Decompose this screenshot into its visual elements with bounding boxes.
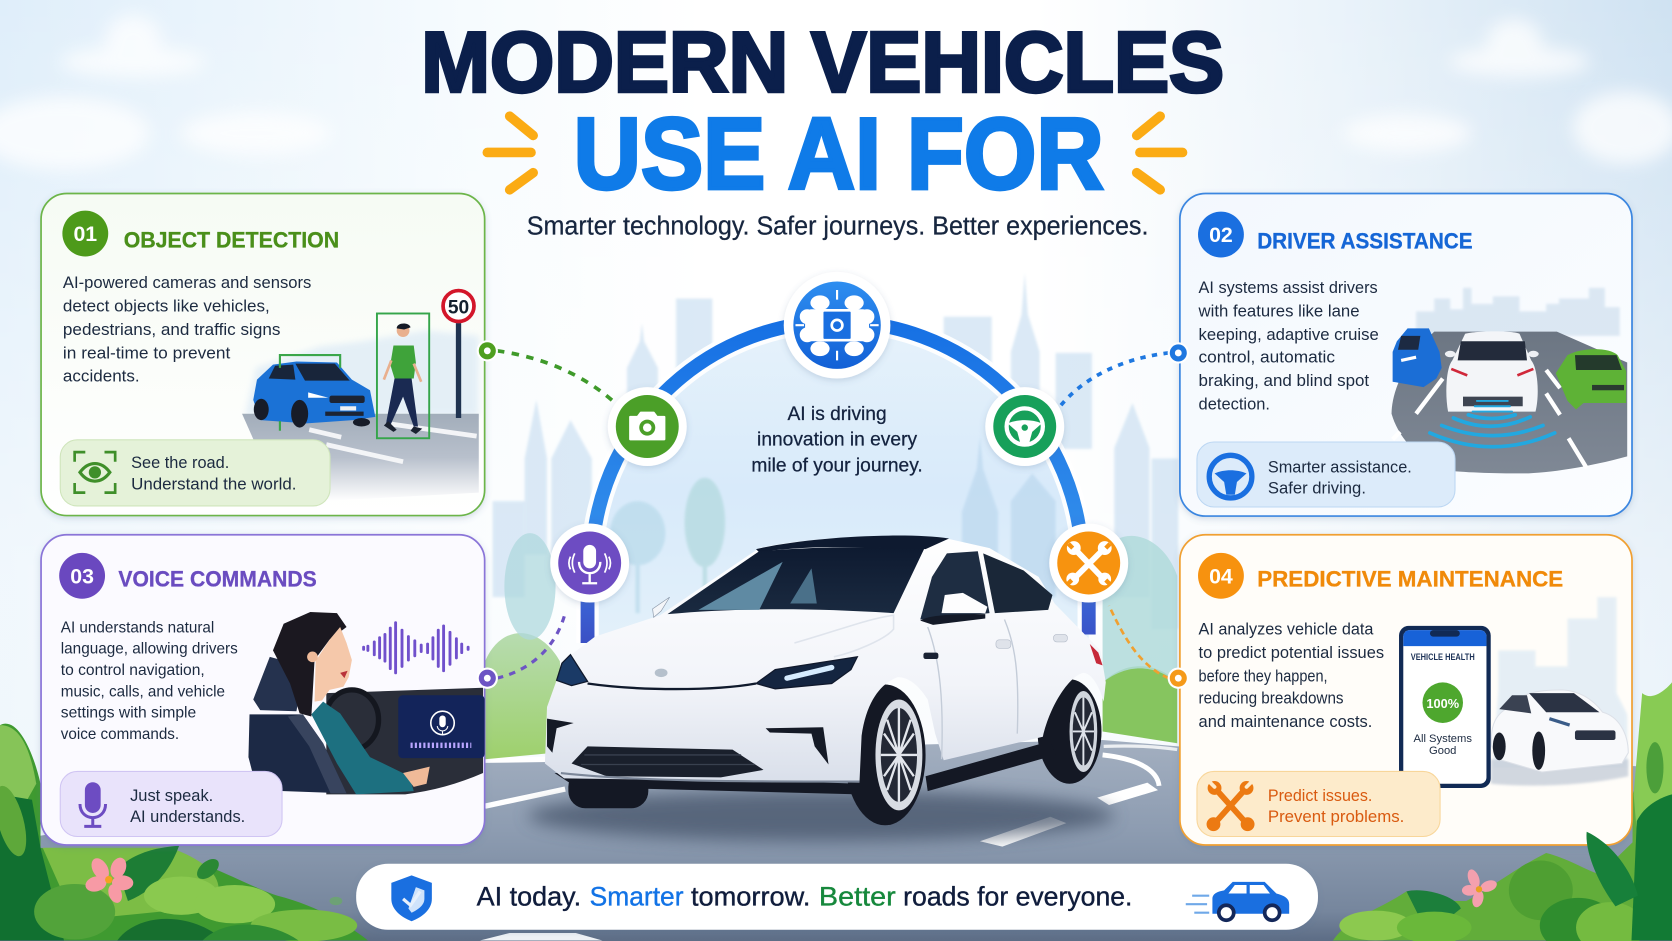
pedestrian detection box bbox=[377, 313, 429, 438]
car detection box bbox=[280, 355, 340, 431]
description: to control navigation, bbox=[61, 662, 205, 679]
inner arc disc bbox=[588, 321, 1089, 661]
heading: VOICE COMMANDS bbox=[118, 566, 317, 591]
speed limit sign: 50 bbox=[448, 297, 469, 318]
description: voice commands. bbox=[61, 726, 179, 743]
title line one: MODERN VEHICLES bbox=[421, 16, 1224, 111]
icon: microphone bbox=[550, 524, 629, 602]
description: settings with simple bbox=[61, 705, 196, 722]
sound waveform bbox=[364, 623, 468, 673]
center caption: innovation in every bbox=[757, 430, 917, 451]
scene: road, car, pedestrian and sign bbox=[242, 291, 479, 501]
connector dot: driver assistance bbox=[1168, 342, 1189, 364]
icon: microphone bbox=[80, 784, 106, 826]
description: reducing breakdowns bbox=[1199, 689, 1344, 708]
badge 01: 01 bbox=[73, 222, 97, 246]
road bbox=[0, 740, 1672, 941]
panel: predictive maintenance bbox=[1180, 535, 1632, 845]
face bbox=[315, 627, 352, 702]
tagline pill: Smarter assistance. bbox=[1268, 457, 1412, 476]
description: music, calls, and vehicle bbox=[61, 683, 225, 700]
description: detection. bbox=[1199, 394, 1270, 413]
description: to predict potential issues bbox=[1199, 643, 1384, 662]
rear wheel rim bbox=[1070, 691, 1097, 772]
wheels and underside bbox=[554, 679, 1102, 825]
main arc connecting icons bbox=[588, 321, 1089, 643]
heading: PREDICTIVE MAINTENANCE bbox=[1257, 566, 1563, 591]
tagline pill bbox=[60, 440, 330, 506]
skyline inside disc bbox=[610, 436, 1056, 613]
bumper intakes bbox=[547, 719, 574, 753]
description: before they happen, bbox=[1199, 666, 1328, 685]
connector dot: voice bbox=[477, 667, 498, 689]
scene: highway with sensing car bbox=[1392, 288, 1627, 473]
badge 02 bbox=[1198, 212, 1244, 258]
scene road bbox=[1491, 759, 1628, 786]
city skyline bbox=[493, 273, 1178, 629]
hand bbox=[403, 767, 430, 787]
subtitle: Smarter technology. Safer journeys. Better experiences. bbox=[527, 213, 1148, 241]
description: with features like lane bbox=[1198, 302, 1360, 321]
center caption: mile of your journey. bbox=[751, 455, 923, 476]
icon: eye bbox=[75, 452, 115, 493]
description: AI analyzes vehicle data bbox=[1199, 619, 1374, 638]
description: accidents. bbox=[63, 367, 140, 386]
grille bbox=[572, 746, 763, 777]
description: AI-powered cameras and sensors bbox=[63, 273, 311, 292]
car shadow bbox=[528, 790, 1114, 841]
description: AI systems assist drivers bbox=[1199, 278, 1378, 297]
hair bbox=[273, 612, 347, 717]
icon: crossed wrenches bbox=[1207, 782, 1254, 831]
badge 01 bbox=[62, 211, 108, 256]
description: braking, and blind spot bbox=[1199, 371, 1370, 390]
heading: OBJECT DETECTION bbox=[124, 227, 339, 252]
icon: shield bbox=[391, 875, 432, 921]
tagline pill bbox=[60, 771, 282, 837]
dashboard screen bbox=[398, 695, 485, 758]
bottom banner bbox=[356, 864, 1318, 930]
headrest bbox=[253, 657, 300, 711]
mirror bbox=[920, 614, 985, 625]
badge bbox=[655, 669, 668, 677]
electric car bbox=[545, 536, 1106, 825]
description: language, allowing drivers bbox=[61, 641, 238, 658]
description bbox=[63, 273, 311, 386]
description: keeping, adaptive cruise bbox=[1199, 325, 1379, 344]
right headlight bbox=[756, 657, 857, 689]
tagline pill: See the road. bbox=[131, 453, 229, 472]
banner text: tomorrow. bbox=[691, 881, 810, 911]
phone: vehicle health: All Systems bbox=[1414, 733, 1472, 745]
tagline pill: Understand the world. bbox=[131, 474, 296, 493]
icon: camera bbox=[608, 387, 687, 466]
tail light bbox=[1090, 644, 1103, 665]
road markings bbox=[485, 759, 557, 760]
front wheel rim bbox=[875, 699, 922, 810]
icon: moving car bbox=[1186, 882, 1289, 920]
connector: driver assistance bbox=[1061, 353, 1169, 405]
description: AI understands natural bbox=[61, 619, 214, 636]
black roof bbox=[756, 536, 949, 552]
panel: voice commands bbox=[41, 535, 485, 845]
tagline pill: Just speak. bbox=[130, 786, 213, 805]
connector: voice bbox=[497, 613, 565, 678]
center caption bbox=[751, 404, 923, 476]
clouds bbox=[0, 15, 1672, 170]
connector dot: maintenance bbox=[1168, 667, 1189, 689]
phone: vehicle health bbox=[1399, 626, 1491, 788]
description bbox=[1198, 278, 1379, 413]
tagline pill bbox=[1197, 771, 1440, 837]
pedestrian bbox=[384, 323, 422, 434]
blue car bbox=[1393, 328, 1442, 387]
description: in real-time to prevent bbox=[63, 343, 231, 362]
seat bbox=[248, 714, 347, 793]
tagline pill bbox=[1197, 442, 1455, 507]
icon: wrench tools bbox=[1049, 524, 1128, 602]
banner text: roads for everyone. bbox=[903, 881, 1132, 911]
icon: steering wheel bbox=[985, 387, 1064, 466]
steering wheel bbox=[325, 690, 379, 750]
banner text: AI today. bbox=[477, 881, 581, 911]
blue car bbox=[253, 361, 375, 428]
sun rays bbox=[487, 116, 1183, 190]
banner text: Better bbox=[819, 881, 896, 911]
illustration: woman driver speaking bbox=[248, 612, 485, 794]
description: control, automatic bbox=[1199, 348, 1335, 367]
windshield bbox=[668, 547, 925, 614]
center caption: AI is driving bbox=[787, 404, 887, 425]
description bbox=[1199, 619, 1384, 731]
door details bbox=[928, 620, 1018, 759]
icon: steering wheel bbox=[1209, 455, 1252, 498]
hood line bbox=[588, 683, 756, 689]
grass and trees bbox=[485, 480, 1177, 759]
badge 03 bbox=[59, 553, 105, 599]
badge 04 bbox=[1198, 553, 1244, 599]
panel: object detection bbox=[41, 194, 485, 516]
connector: object detection bbox=[497, 351, 615, 403]
panel: driver assistance bbox=[1180, 194, 1632, 516]
phone: vehicle health: Good bbox=[1429, 745, 1456, 757]
badge 03: 03 bbox=[70, 564, 94, 588]
phone: vehicle health: 100% bbox=[1426, 696, 1460, 711]
flower left bbox=[84, 855, 133, 905]
heading: DRIVER ASSISTANCE bbox=[1257, 228, 1473, 253]
leaf over maintenance panel bbox=[1586, 832, 1638, 906]
bushes left bbox=[0, 724, 368, 941]
dashboard bbox=[326, 688, 483, 794]
windshield reflections bbox=[698, 562, 783, 610]
scene skyline bbox=[1493, 597, 1627, 768]
description: detect objects like vehicles, bbox=[63, 296, 270, 315]
phone: vehicle health: VEHICLE HEALTH bbox=[1411, 652, 1475, 662]
connector: maintenance bbox=[1109, 606, 1169, 678]
description: and maintenance costs. bbox=[1199, 712, 1372, 731]
teal top bbox=[311, 702, 414, 794]
title line two: USE AI FOR bbox=[574, 98, 1104, 211]
banner text bbox=[477, 881, 1132, 911]
banner text: Smarter bbox=[590, 881, 684, 911]
side windows bbox=[920, 551, 990, 620]
connector dot: object detection bbox=[477, 340, 498, 361]
car body bbox=[545, 536, 1106, 783]
white car bbox=[1491, 690, 1628, 772]
description bbox=[61, 619, 238, 743]
badge 02: 02 bbox=[1209, 223, 1233, 247]
description: pedestrians, and traffic signs bbox=[63, 320, 280, 339]
flower right bbox=[1462, 868, 1498, 909]
hood crease bbox=[794, 615, 894, 657]
white car bbox=[1445, 331, 1539, 412]
icon: AI brain chip bbox=[784, 272, 890, 379]
bumper lip bbox=[561, 773, 859, 782]
sonar waves bbox=[1430, 401, 1555, 447]
tagline pill: Prevent problems. bbox=[1268, 807, 1404, 826]
badge 04: 04 bbox=[1209, 564, 1233, 588]
speed limit sign bbox=[443, 291, 474, 418]
tagline pill: Predict issues. bbox=[1268, 786, 1372, 805]
tagline pill: AI understands. bbox=[130, 807, 245, 826]
tagline pill: Safer driving. bbox=[1268, 479, 1366, 498]
green car bbox=[1556, 349, 1626, 409]
left headlight bbox=[557, 655, 588, 686]
bushes right bbox=[1333, 682, 1672, 941]
